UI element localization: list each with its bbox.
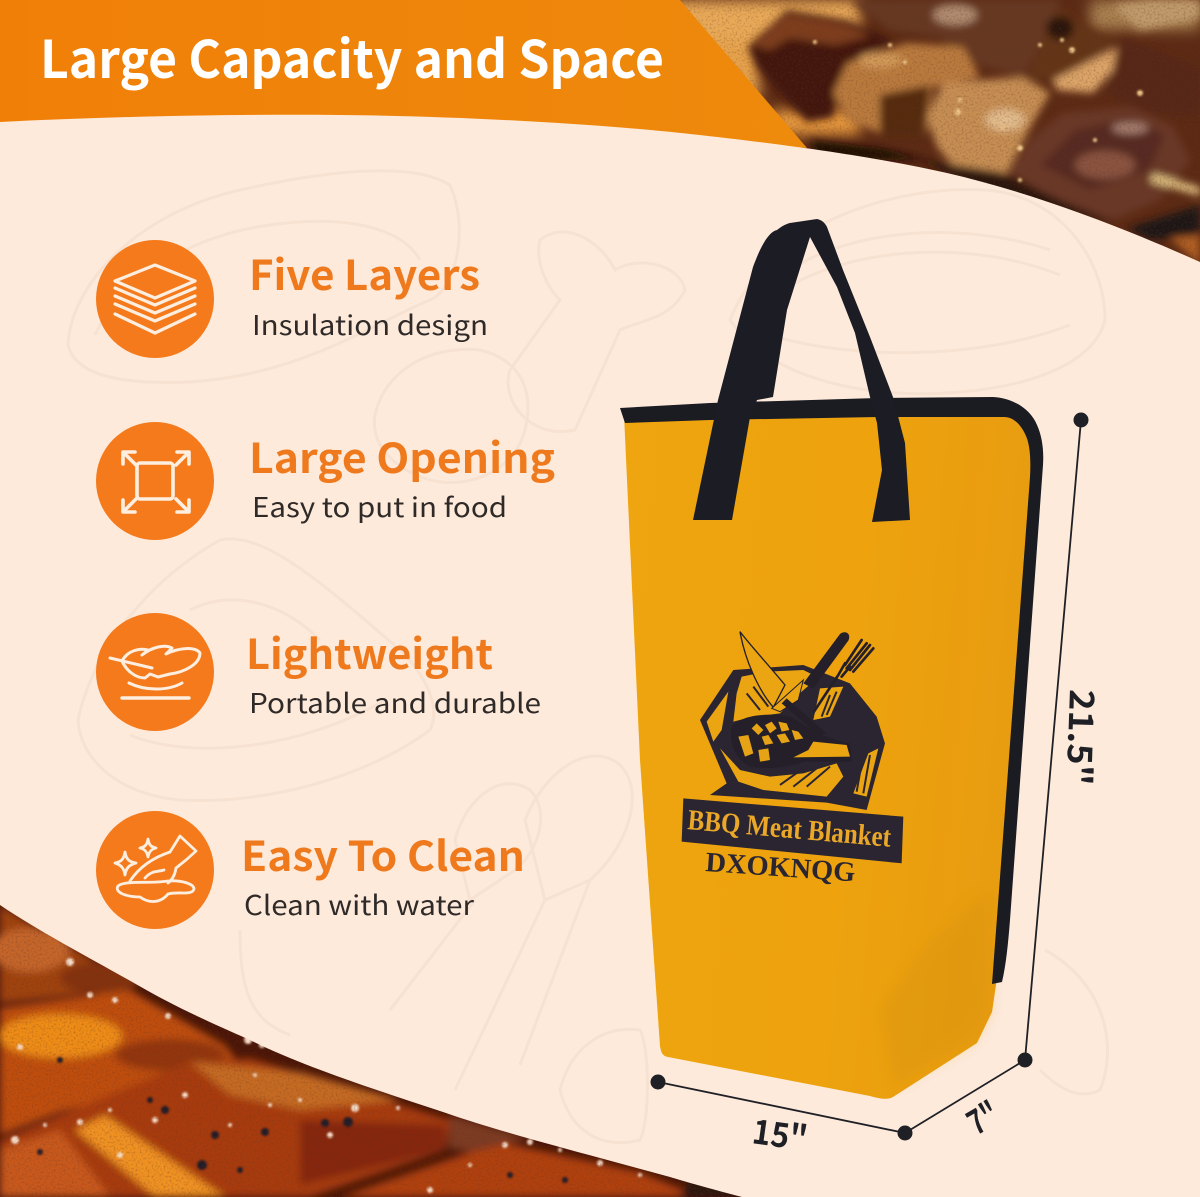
photo: grilled skewers top right	[670, 0, 1200, 270]
bag logo	[682, 632, 903, 888]
photo: grilled pork belly bottom left	[0, 900, 760, 1197]
background food line art	[68, 171, 1108, 1143]
dimension: depth 7 inches: 7"	[956, 1087, 1007, 1145]
logo: knife	[740, 632, 785, 707]
text: insulation design: Insulation design	[252, 304, 488, 343]
icon: spilled bottle and sparkles	[96, 811, 214, 929]
icon: stacked layers	[96, 240, 214, 358]
logo: butcher paper	[700, 665, 885, 810]
bag handles	[693, 219, 910, 522]
orange header band	[0, 0, 807, 148]
bag body	[624, 405, 1034, 1099]
icon: feather	[96, 613, 214, 731]
feature: large opening	[96, 422, 555, 540]
heading: Lightweight: Lightweight	[246, 621, 493, 681]
dimension: width 15 inches: 15"	[750, 1104, 811, 1161]
logo: banner text: BBQ Meat Blanket	[686, 804, 893, 854]
logo: fork	[814, 640, 873, 712]
logo: brand name: DXOKNQG	[705, 847, 857, 888]
icon: expand square	[96, 422, 214, 540]
logo artwork	[682, 632, 903, 863]
feature: five layers	[96, 240, 488, 358]
feature: lightweight	[96, 613, 541, 731]
heading: Large Opening: Large Opening	[249, 425, 555, 485]
logo: steak	[731, 715, 852, 768]
text: easy to put in food: Easy to put in food	[252, 486, 507, 525]
heading: Easy To Clean: Easy To Clean	[241, 823, 525, 883]
title: Large Capacity and Space	[40, 18, 664, 93]
logo: paper highlights	[733, 670, 818, 722]
product: insulated bag	[620, 219, 1043, 1099]
dimension: height 21.5 inches: 21.5"	[1057, 689, 1109, 786]
logo: banner	[682, 798, 903, 863]
feature: easy to clean	[96, 811, 525, 929]
bag lower right shading	[880, 890, 990, 1085]
text: portable and durable: Portable and durable	[249, 682, 541, 721]
dimension: height 21.5 inches	[1018, 412, 1109, 1068]
zipper trim	[620, 397, 1043, 984]
dimension: depth 7 inches	[905, 1060, 1025, 1145]
dimension: width 15 inches	[650, 1074, 912, 1161]
heading: Five Layers: Five Layers	[249, 242, 480, 302]
text: clean with water: Clean with water	[244, 884, 475, 923]
